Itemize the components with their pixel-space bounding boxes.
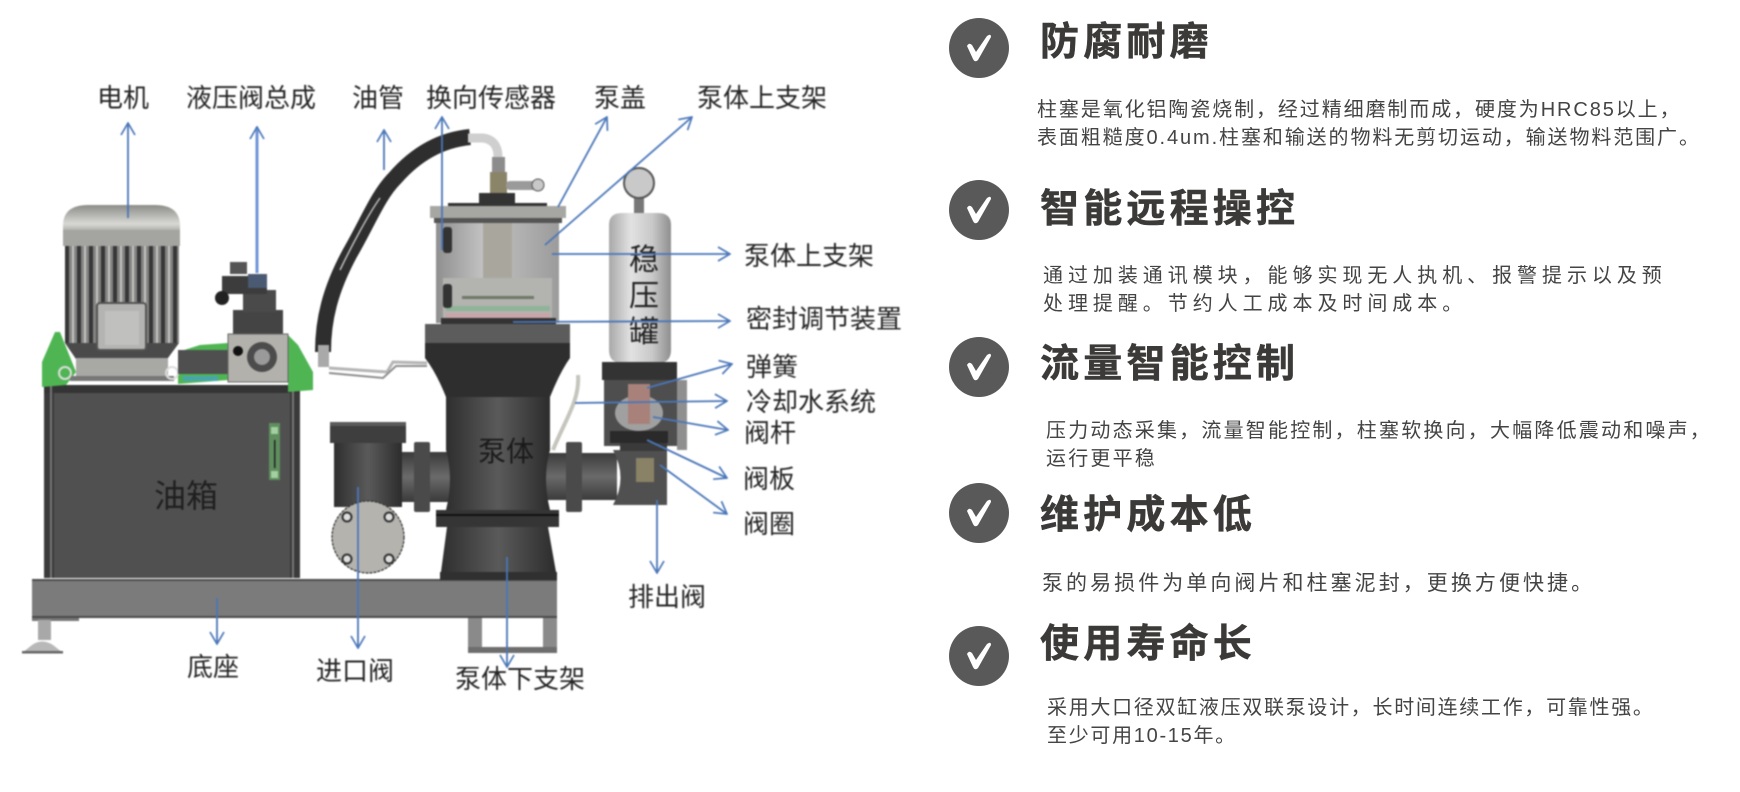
panel: feature 1 [949, 18, 1701, 149]
text block: 运行更平稳 [1046, 448, 1157, 470]
inlet valve [330, 422, 450, 573]
label: inlet valve: 进口阀 [316, 656, 394, 686]
spring valve chamber [602, 362, 687, 451]
text block: 泵的易损件为单向阀片和柱塞泥封，更换方便快捷。 [1042, 572, 1595, 595]
label: valve plate: 阀板 [743, 464, 795, 494]
icon: check [949, 483, 1009, 543]
stabilizer tank label: 稳 [629, 244, 659, 277]
panel: feature 4 [949, 483, 1595, 595]
pump cylinder [425, 138, 570, 343]
stabilizer tank: 压 [629, 280, 659, 313]
discharge pipe and valve [545, 442, 667, 512]
icon: check [949, 337, 1009, 397]
base frame [22, 579, 557, 654]
label: reversing sensor: 换向传感器 [426, 83, 556, 113]
text block: 表面粗糙度0.4um.柱塞和输送的物料无剪切运动，输送物料范围广。 [1037, 127, 1701, 149]
text block: 柱塞是氧化铝陶瓷烧制，经过精细磨制而成，硬度为HRC85以上， [1037, 99, 1681, 121]
label: oil pipe: 油管 [352, 83, 404, 113]
heading: 智能远程操控 [1040, 188, 1299, 231]
icon: check [949, 180, 1009, 240]
label: pump cover: 泵盖 [594, 83, 646, 113]
text block [1037, 99, 1701, 149]
heading: 流量智能控制 [1040, 343, 1299, 386]
label: spring: 弹簧 [746, 352, 798, 382]
heading: 使用寿命长 [1040, 623, 1256, 666]
stabilizer tank: 罐 [629, 316, 659, 349]
heading: 防腐耐磨 [1040, 21, 1213, 64]
pump body label: 泵体 [478, 436, 534, 467]
label: valve stem: 阀杆 [744, 418, 796, 448]
label: pump upper bracket top: 泵体上支架 [697, 83, 827, 113]
sight gauge [269, 423, 280, 480]
label: pump lower bracket: 泵体下支架 [455, 664, 585, 694]
panel: feature 5 [949, 622, 1655, 747]
pump body [425, 343, 570, 580]
label: pump upper bracket: 泵体上支架 [744, 241, 874, 271]
arrows [128, 117, 732, 667]
label: discharge valve: 排出阀 [628, 582, 706, 612]
motor [59, 205, 180, 381]
label: hydraulic valve: 液压阀总成 [186, 83, 316, 113]
machine diagram [21, 83, 902, 694]
icon: check [949, 18, 1009, 78]
text block: 处理提醒。节约人工成本及时间成本。 [1043, 293, 1467, 315]
label: valve ring: 阀圈 [743, 509, 795, 539]
label: motor: 电机 [97, 83, 149, 113]
text block [1047, 696, 1655, 747]
terminal box [97, 303, 146, 350]
label: seal adjuster: 密封调节装置 [746, 304, 902, 334]
label: base: 底座 [187, 652, 239, 682]
oil hose [318, 137, 578, 450]
text block [1043, 265, 1667, 315]
oil tank [44, 385, 300, 578]
adjustable foot [22, 620, 63, 654]
green motor mounts [42, 332, 313, 392]
text block: 通过加装通讯模块，能够实现无人执机、报警提示以及预 [1043, 265, 1667, 287]
text block [1046, 420, 1712, 470]
text block: 采用大口径双缸液压双联泵设计，长时间连续工作，可靠性强。 [1047, 697, 1655, 719]
icon: check [949, 626, 1009, 686]
inlet valve disc [332, 501, 404, 573]
stabilizer tank [609, 168, 671, 363]
hydraulic valve assembly [178, 262, 288, 382]
pump lower bracket [468, 618, 557, 653]
heading: 维护成本低 [1040, 494, 1256, 537]
panel: feature 2 [949, 180, 1667, 315]
panel: feature 3 [949, 337, 1712, 470]
pressure gauge [624, 168, 654, 213]
label: cooling water: 冷却水系统 [746, 387, 876, 417]
pump cover [430, 203, 566, 223]
text block: 至少可用10-15年。 [1047, 725, 1237, 747]
cylinder fitting [468, 138, 544, 203]
component labels [97, 83, 902, 694]
text block: 压力动态采集，流量智能控制，柱塞软换向，大幅降低震动和噪声， [1046, 420, 1712, 442]
tank label: 油箱 [154, 478, 218, 514]
